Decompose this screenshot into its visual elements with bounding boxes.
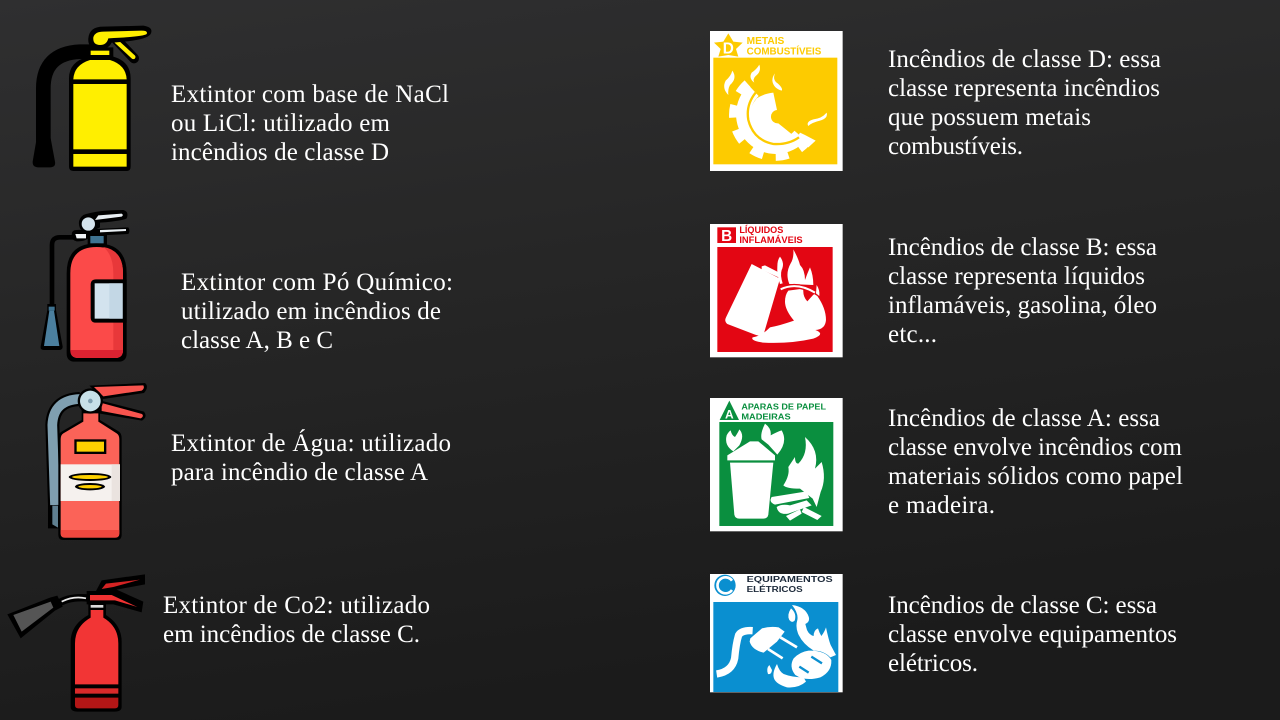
sign: class B flammable liquids: LÍQUIDOS [739,224,783,235]
icon: red dry chemical extinguisher [41,210,129,362]
text: water extinguisher description: Extintor de Água: utilizado [171,429,451,457]
text: CO2 extinguisher description: em incêndios de classe C. [163,621,420,648]
text: dry chemical extinguisher description [181,269,453,354]
sign: class B flammable liquids: B [721,228,732,245]
text: NaCl extinguisher description: Extintor com base de NaCl [171,81,449,108]
text: water extinguisher description [171,429,451,486]
text: dry chemical extinguisher description: utilizado em incêndios de [181,298,441,325]
text: class D description: que possuem metais [888,104,1091,131]
sign: class C electrical equipment [710,574,843,692]
text: CO2 extinguisher description [163,592,430,648]
text: class C description: elétricos. [888,650,978,677]
sign: class A paper and wood [710,398,843,531]
sign: class C electrical equipment: ELÉTRICOS [747,585,803,594]
text: class D description: classe representa incêndios [888,75,1160,102]
text: class B description [888,234,1157,348]
text: CO2 extinguisher description: Extintor de Co2: utilizado [163,592,430,619]
text: class C description: Incêndios de classe C: essa [888,592,1157,619]
text: class B description: inflamáveis, gasolina, óleo [888,292,1157,319]
text: class D description: combustíveis. [888,133,1023,160]
icon: water extinguisher [52,383,147,540]
sign: class D combustible metals [710,31,843,171]
sign: class B flammable liquids [710,224,843,357]
text: class D description [888,46,1161,160]
text: class B description: etc... [888,321,937,348]
text: class A description: Incêndios de classe A: essa [888,405,1160,432]
text: water extinguisher description: para incêndio de classe A [171,459,428,486]
sign: class D combustible metals: COMBUSTÍVEIS [747,47,822,58]
icon: yellow NaCl/LiCl extinguisher [33,26,151,171]
text: class D description: Incêndios de classe D: essa [888,46,1161,73]
text: class C description [888,592,1177,677]
sign: class C electrical equipment: EQUIPAMENTOS [747,575,834,584]
sign: class A paper and wood: MADEIRAS [741,411,791,421]
text: class B description: Incêndios de classe B: essa [888,234,1157,261]
text: class A description [888,405,1183,519]
text: class C description: classe envolve equipamentos [888,621,1177,648]
text: class A description: e madeira. [888,492,995,519]
icon: CO2 extinguisher [7,574,145,712]
sign: class A paper and wood: A [725,408,734,422]
sign: class D combustible metals: D [723,40,734,57]
sign: class A paper and wood: APARAS DE PAPEL [741,401,827,411]
text: NaCl extinguisher description: ou LiCl: utilizado em [171,110,391,137]
text: NaCl extinguisher description: incêndios de classe D [171,139,389,166]
text: class A description: classe envolve incêndios com [888,434,1183,461]
text: dry chemical extinguisher description: Extintor com Pó Químico: [181,269,453,296]
sign: class B flammable liquids: INFLAMÁVEIS [739,234,803,245]
text: dry chemical extinguisher description: classe A, B e C [181,327,333,354]
text: NaCl extinguisher description [171,81,449,166]
text: class B description: classe representa líquidos [888,263,1145,290]
text: class A description: materiais sólidos como papel [888,463,1183,490]
sign: class D combustible metals: METAIS [747,36,785,47]
